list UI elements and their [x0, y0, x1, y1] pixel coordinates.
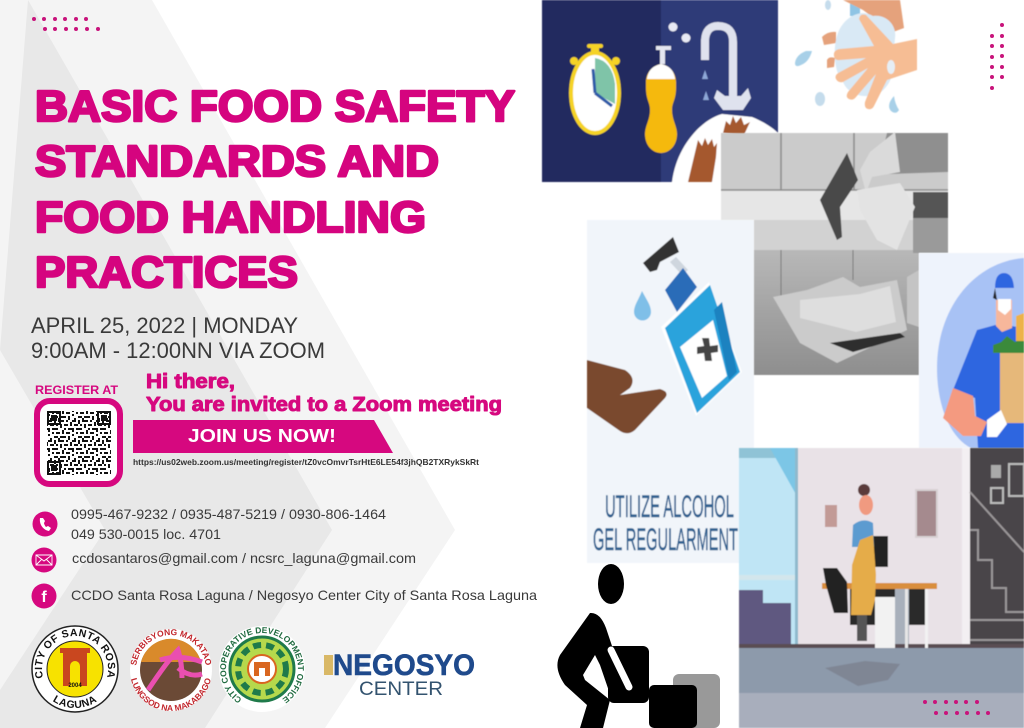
desk [822, 583, 937, 589]
sanitizer bottle [643, 237, 742, 416]
sofa [739, 590, 791, 645]
panel: sanitizer illustration: GEL REGULARMENT [593, 521, 738, 557]
logo: serbisyong makatao: SERBISYONG MAKATAO [130, 629, 212, 666]
contact: email [32, 548, 416, 572]
logo: city cooperative development office: CITY COOPERATIVE DEVELOPMENT OFFICE [220, 627, 304, 704]
photo: gloved hands cleaning [721, 132, 948, 375]
illustration: delivery person [919, 253, 1024, 448]
logo: serbisyong makatao: LUNGSOD NA MAKABAGO [131, 678, 210, 711]
logo: city of santa rosa seal: 2004 [68, 683, 82, 689]
invitation text: You are invited to a Zoom meeting [146, 394, 502, 416]
illustration: timer, soap and faucet [542, 0, 778, 182]
logo: negosyo center: CENTER [359, 679, 443, 700]
hand [587, 360, 667, 433]
invitation text: Hi there, [146, 371, 235, 393]
join us banner [133, 420, 393, 453]
chair [823, 568, 848, 613]
register QR block: REGISTER AT [35, 385, 118, 397]
contact: facebook: CCDO Santa Rosa Laguna / Negosyo Center City of Santa Rosa Laguna [71, 587, 537, 603]
panel: sanitizer illustration [587, 220, 754, 563]
panel: sanitizer illustration: UTILIZE ALCOHOL [605, 488, 734, 524]
decorative dots: top left [32, 17, 100, 31]
illustration: office cleaner [739, 448, 1024, 728]
invitation text [146, 371, 502, 416]
logo: city of santa rosa seal [31, 625, 119, 713]
faucet [668, 22, 751, 110]
date and time: 9:00AM - 12:00NN VIA ZOOM [31, 338, 325, 363]
logo: city of santa rosa seal: LAGUNA [53, 695, 97, 708]
date and time [31, 313, 325, 363]
stopwatch [570, 44, 620, 133]
zoom link: https://us02web.zoom.us/meeting/register/tZ0vcOmvrTsrHtE6LE54f3jhQB2TXRykSkRt [133, 457, 479, 467]
floor [739, 644, 1024, 648]
soap bottle [645, 46, 677, 153]
contact: facebook [32, 584, 537, 608]
decorative dots: top right [990, 23, 1004, 90]
title: PRACTICES [35, 248, 298, 297]
join us banner: JOIN US NOW! [188, 426, 336, 446]
logo: city of santa rosa seal: CITY OF SANTA ROSA [34, 628, 116, 678]
title [35, 82, 515, 297]
contact: phone: 0995-467-9232 / 0935-487-5219 / 0930-806-1464 [71, 506, 386, 522]
wall art [916, 490, 937, 537]
title: STANDARDS AND [35, 137, 439, 186]
title: BASIC FOOD SAFETY [35, 82, 515, 131]
contact: phone [32, 506, 386, 542]
register QR block [35, 385, 120, 484]
contact: facebook: f [41, 589, 47, 606]
decorative dots: bottom right [923, 700, 990, 715]
title: FOOD HANDLING [35, 193, 426, 242]
sink and hands [672, 114, 778, 182]
logo: serbisyong makatao [130, 629, 212, 711]
illustration: person lifting boxes [557, 564, 720, 728]
contact: phone: 049 530-0015 loc. 4701 [71, 526, 221, 542]
cleaner [858, 484, 870, 496]
caption [593, 488, 738, 557]
logo: negosyo center: NEGOSYO [333, 649, 475, 682]
contact: email: ccdosantaros@gmail.com / ncsrc_laguna@gmail.com [72, 550, 416, 566]
logo: negosyo center [324, 649, 475, 700]
date and time: APRIL 25, 2022 | MONDAY [31, 313, 298, 338]
water drop [634, 291, 651, 320]
illustration: washing hands [795, 0, 917, 113]
